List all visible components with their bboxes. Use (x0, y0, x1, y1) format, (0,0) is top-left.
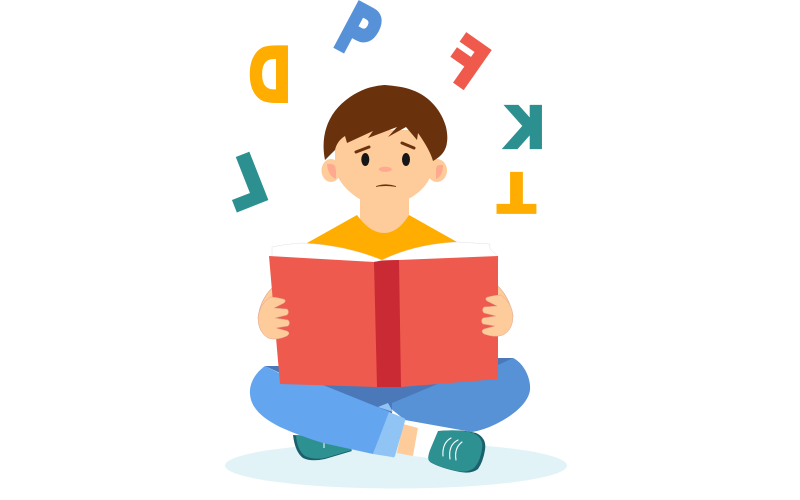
shadow between the legs (290, 370, 460, 415)
left shoe (293, 435, 352, 460)
left eye (361, 153, 369, 166)
right ear (427, 159, 447, 182)
face (335, 130, 433, 205)
left ear (322, 159, 340, 182)
leg shadow on the right (496, 358, 513, 366)
right shoe upper (428, 430, 482, 472)
floating letters (214, 0, 545, 225)
floor shadow (225, 442, 567, 488)
right eye (402, 153, 410, 166)
left hand (258, 297, 290, 339)
left arm (258, 285, 290, 318)
left leg (250, 366, 390, 454)
book spine (374, 260, 401, 387)
left inner ear (327, 164, 336, 179)
right arm (482, 285, 513, 316)
right shoe dark edge (430, 430, 485, 473)
letter K mirrored: K (505, 96, 545, 161)
right hand (482, 295, 513, 336)
left eyebrow (356, 147, 369, 152)
leg shadow on the left (265, 366, 282, 374)
open book (269, 242, 498, 387)
shoe lace mark (323, 441, 325, 448)
right leg (385, 358, 530, 432)
nose (379, 167, 392, 172)
letter L mirrored and tilted: L (214, 140, 277, 225)
mouth (376, 185, 396, 186)
right inner ear (436, 165, 443, 179)
trouser cuff (373, 412, 405, 457)
white sock (413, 428, 438, 458)
shoe laces (443, 438, 462, 460)
neck (360, 190, 409, 245)
letter F mirrored and tilted: F (427, 22, 501, 104)
shirt (295, 215, 470, 262)
book cover (269, 256, 498, 387)
left shoe upper (296, 435, 352, 459)
book pages (272, 242, 498, 262)
letter D mirrored: D (248, 33, 292, 120)
letter T upside down: T (497, 159, 536, 222)
ankle skin (397, 424, 418, 456)
boy (250, 85, 530, 473)
right eyebrow (402, 143, 414, 148)
trouser fold (378, 403, 393, 412)
hair (324, 85, 447, 161)
